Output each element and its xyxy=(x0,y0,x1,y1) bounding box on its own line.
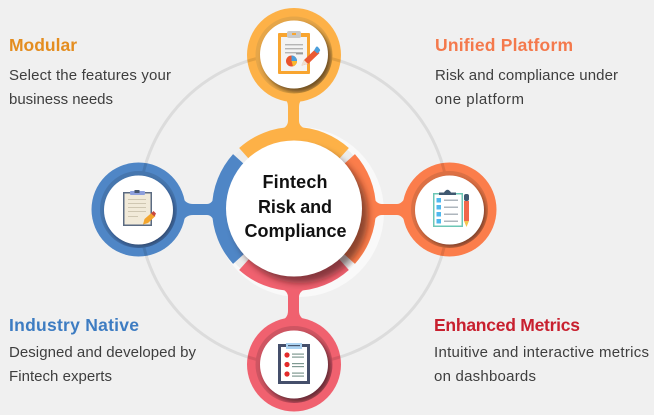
disc: bottom xyxy=(247,318,341,412)
large orbit ring xyxy=(139,54,449,364)
text block: Modular: Modular xyxy=(9,35,77,55)
hub title: Risk and xyxy=(258,197,332,217)
text block: Unified Platform: Risk and compliance under xyxy=(435,67,618,84)
text block: Unified Platform xyxy=(435,35,618,108)
segment: red xyxy=(244,264,344,283)
text block: Modular: Select the features your xyxy=(9,67,171,84)
text block: Industry Native: Designed and developed by xyxy=(9,344,196,361)
hub shadow xyxy=(232,147,368,283)
connector: right xyxy=(373,196,406,223)
text block: Enhanced Metrics: Intuitive and interactive metrics xyxy=(434,344,649,361)
text block: Enhanced Metrics: Enhanced Metrics xyxy=(434,315,580,335)
text block: Modular xyxy=(9,35,171,108)
text block: Industry Native xyxy=(9,315,196,385)
text block: Enhanced Metrics xyxy=(434,315,649,385)
segment: blue xyxy=(220,160,239,258)
hub white circle xyxy=(226,140,362,276)
orbit ring crossing tint xyxy=(139,54,449,364)
text block: Industry Native: Industry Native xyxy=(9,315,139,335)
icon: checklist with pencil xyxy=(433,190,469,227)
text block: Modular: business needs xyxy=(9,91,113,108)
disc: right xyxy=(402,162,496,256)
connector: top xyxy=(280,96,308,130)
icon: checklist with red bullets xyxy=(278,343,310,384)
connector: left xyxy=(182,196,215,223)
text block: Unified Platform: Unified Platform xyxy=(435,35,573,55)
disc: left xyxy=(92,162,186,256)
disc: top xyxy=(247,8,341,102)
white crescent behind centre xyxy=(214,127,384,297)
text block: Enhanced Metrics: on dashboards xyxy=(434,368,536,385)
inner dark bands xyxy=(95,10,495,410)
hub ring segments xyxy=(214,129,374,289)
node white discs xyxy=(104,20,484,398)
icon: notepad with pencil xyxy=(123,190,156,226)
segment: orange xyxy=(349,160,368,258)
node discs xyxy=(92,8,496,412)
hub title: Compliance xyxy=(244,221,346,241)
text block: Unified Platform: one platform xyxy=(435,91,524,108)
hub title xyxy=(244,172,346,241)
segment: yellow xyxy=(244,135,344,154)
text block: Industry Native: Fintech experts xyxy=(9,368,112,385)
icon: clipboard with pie chart and pencil xyxy=(278,31,320,74)
connector: bottom xyxy=(280,288,308,321)
hub title: Fintech xyxy=(262,172,328,192)
